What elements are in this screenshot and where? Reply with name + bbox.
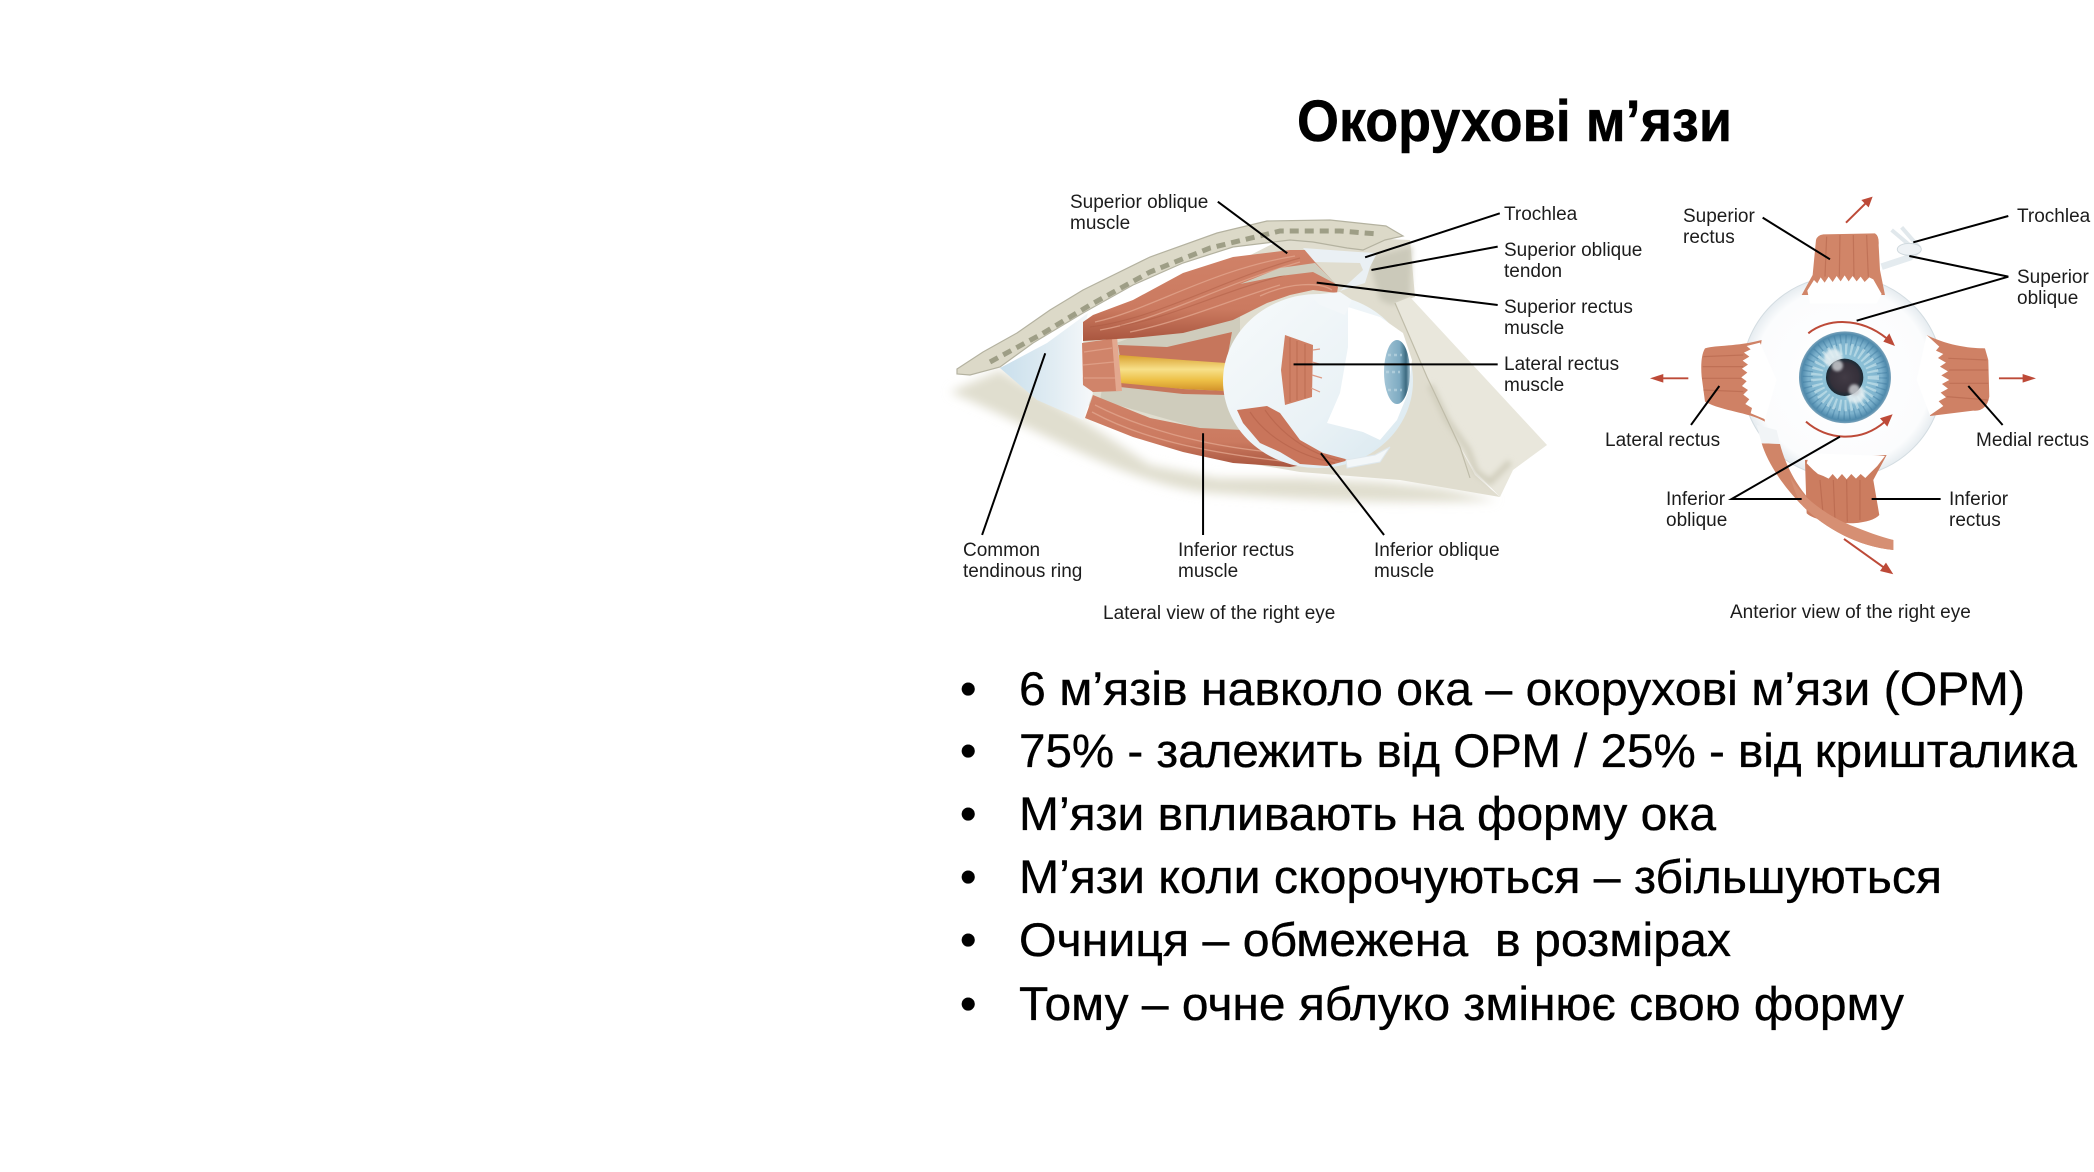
bullet list	[960, 662, 2078, 1030]
label: superior oblique: oblique	[2017, 288, 2078, 309]
illustration: lateral eye anatomy	[950, 202, 1547, 535]
label: superior oblique: Superior	[2017, 267, 2089, 288]
lower-left tendon of inferior oblique	[1757, 425, 1780, 444]
caption: lateral view: Lateral view of the right eye	[1103, 603, 1335, 624]
label: superior rectus muscle: muscle	[1504, 318, 1564, 339]
label: superior rectus: Superior	[1683, 206, 1755, 227]
muscle stump at the ring	[1082, 338, 1122, 392]
bullet 4: •	[960, 850, 976, 903]
inferior rectus muscle	[1085, 395, 1325, 467]
caption: anterior view: Anterior view of the right eye	[1730, 602, 1971, 623]
panel: anterior view of the right eye	[1605, 197, 2091, 623]
gap behind muscles	[1100, 300, 1240, 440]
superior oblique and superior rectus muscles	[1083, 250, 1338, 341]
bullet 6: •	[960, 977, 976, 1030]
superior oblique tendon and trochlea	[1303, 248, 1377, 291]
leader lines	[1691, 216, 2008, 499]
label: superior oblique tendon: Superior oblique	[1504, 240, 1642, 261]
inferior oblique crossing band	[1790, 477, 1893, 550]
eyeball	[1742, 276, 1943, 477]
label: lateral rectus: Lateral rectus	[1605, 430, 1720, 451]
label: inferior oblique muscle: muscle	[1374, 561, 1434, 582]
label: trochlea: Trochlea	[2017, 206, 2091, 227]
muscle separation wedge	[1240, 263, 1336, 284]
inferior rectus muscle	[1805, 455, 1887, 523]
bullet 3: •	[960, 787, 976, 840]
label: inferior oblique: oblique	[1666, 510, 1727, 531]
lateral rectus posterior section	[1118, 332, 1232, 395]
label: inferior rectus muscle: muscle	[1178, 561, 1238, 582]
title: Окорухові м’язи	[1297, 89, 1732, 154]
label: lateral rectus muscle: muscle	[1504, 375, 1564, 396]
label: inferior oblique: Inferior	[1666, 489, 1726, 510]
bullet 1: •	[960, 662, 976, 715]
leader lines	[982, 202, 1500, 535]
bullet 5: •	[960, 913, 976, 966]
inferior oblique muscle	[1762, 443, 1893, 550]
bullet 5: Очниця – обмежена в розмірах	[1019, 913, 1731, 966]
illustration: anterior eye anatomy	[1650, 197, 2036, 574]
label: inferior oblique muscle: Inferior oblique	[1374, 540, 1500, 561]
iris	[1384, 340, 1410, 404]
orbit floor shadow	[950, 370, 1497, 502]
bullet 6: Тому – очне яблуко змінює свою форму	[1019, 977, 1905, 1030]
common tendinous ring	[1000, 313, 1093, 420]
bullet 2: •	[960, 724, 976, 777]
lateral rectus muscle	[1701, 340, 1765, 422]
label: inferior rectus: rectus	[1949, 510, 2001, 531]
upper sheath fibres	[1310, 292, 1352, 315]
label: medial rectus: Medial rectus	[1976, 430, 2089, 451]
label: common tendinous ring: Common	[963, 540, 1040, 561]
lower sheath fibres	[1346, 447, 1390, 468]
orbit lateral wall	[1395, 297, 1547, 497]
red direction arrows	[1650, 197, 2036, 574]
label: superior rectus: rectus	[1683, 227, 1735, 248]
panel: lateral view of the right eye	[950, 192, 1642, 624]
medial rectus muscle	[1927, 335, 1989, 416]
label: superior rectus muscle: Superior rectus	[1504, 297, 1633, 318]
bullet 2: 75% - залежить від ОРМ / 25% - від кришталика	[1019, 724, 2078, 777]
trochlea and tendon	[1882, 227, 1921, 267]
red rotation arcs	[1806, 322, 1895, 437]
label: trochlea: Trochlea	[1504, 204, 1578, 225]
optic nerve	[1119, 355, 1226, 391]
label: inferior rectus: Inferior	[1949, 489, 2009, 510]
tendon fibres	[1741, 275, 1949, 479]
superior rectus muscle	[1802, 233, 1885, 295]
label: lateral rectus muscle: Lateral rectus	[1504, 354, 1619, 375]
upper orbit shadow	[1368, 246, 1412, 305]
orbit back wall	[1083, 235, 1500, 497]
iris and pupil	[1799, 331, 1891, 423]
label: common tendinous ring: tendinous ring	[963, 561, 1082, 582]
bullet 3: М’язи впливають на форму ока	[1019, 787, 1717, 840]
bullet 1: 6 м’язів навколо ока – окорухові м’язи (ОРМ)	[1019, 662, 2025, 715]
orbit roof bone	[957, 220, 1403, 375]
conjunctival sheath	[1327, 307, 1412, 440]
label: inferior rectus muscle: Inferior rectus	[1178, 540, 1294, 561]
label: superior oblique muscle: Superior oblique	[1070, 192, 1208, 213]
lateral rectus muscle on the eyeball	[1281, 335, 1322, 405]
inferior oblique muscle	[1237, 406, 1349, 466]
label: superior oblique muscle: muscle	[1070, 213, 1130, 234]
eyeball	[1223, 294, 1413, 468]
label: superior oblique tendon: tendon	[1504, 261, 1562, 282]
bullet 4: М’язи коли скорочуються – збільшуються	[1019, 850, 1942, 903]
